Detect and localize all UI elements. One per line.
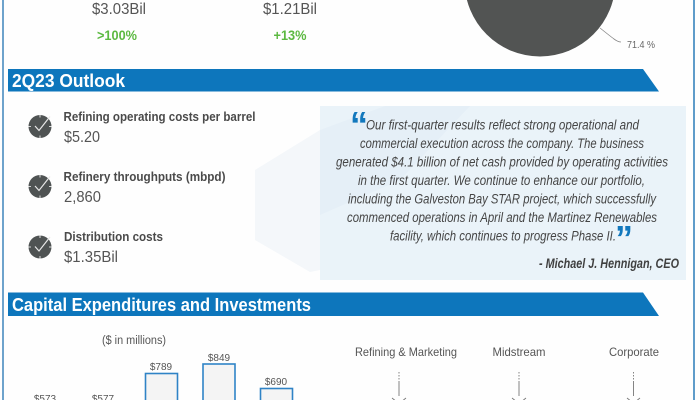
arrow: Midstream [512,372,526,400]
icon: check badge [28,236,52,258]
panel: CEO quote [320,104,686,280]
outlook item: refinery throughputs: 2,860 [64,189,101,206]
pie chart: 71.4 % [627,40,655,51]
bar chart: $789 [150,362,173,373]
label: Refining & Marketing: Refining & Marketing [355,345,457,359]
icon: check badge [28,175,52,198]
quote open mark: “ [350,104,368,145]
chart unit label: ($ in millions) [102,335,166,347]
quote text: commercial execution across the company. The business [360,136,644,151]
quote text: in the first quarter. We continue to enhance our portfolio, [358,173,645,188]
outlook item: refining costs [28,109,256,146]
heading: 2Q23 Outlook: 2Q23 Outlook [12,71,126,91]
quote close mark: ” [615,218,633,259]
outlook item: distribution costs: $1.35Bil [64,249,118,266]
arrow: Refining & Marketing [392,372,406,400]
bar chart: $690 [265,377,288,388]
pie chart [464,0,655,56]
change: right metric: +13% [274,28,306,43]
quote text [336,118,668,244]
bar chart: $849 [208,353,231,364]
arrow: Corporate [627,372,640,400]
value: left metric: $3.03Bil [92,1,146,18]
quote text: facility, which continues to progress Phase II. [390,228,616,244]
watermark hexagon [255,130,320,272]
quote text: Our first-quarter results reflect strong operational and [366,118,639,132]
outlook item: refining costs: Refining operating costs per barrel [64,109,256,124]
outlook item: distribution costs [28,229,163,266]
icon: check badge [28,115,52,138]
outlook item: distribution costs: Distribution costs [64,229,163,244]
label: Corporate: Corporate [609,345,659,359]
label: Midstream: Midstream [492,345,546,359]
outlook item: refining costs: $5.20 [64,129,100,146]
outlook item: refinery throughputs: Refinery throughputs (mbpd) [64,169,226,184]
value: right metric: $1.21Bil [263,1,317,18]
outlook item: refinery throughputs [28,169,226,206]
heading: 2Q23 Outlook [8,69,659,92]
heading: Capital Expenditures and Investments [8,292,659,316]
change: left metric: >100% [97,28,137,43]
bar chart [34,353,292,400]
heading: Capital Expenditures and Investments: Capital Expenditures and Investments [12,295,311,315]
